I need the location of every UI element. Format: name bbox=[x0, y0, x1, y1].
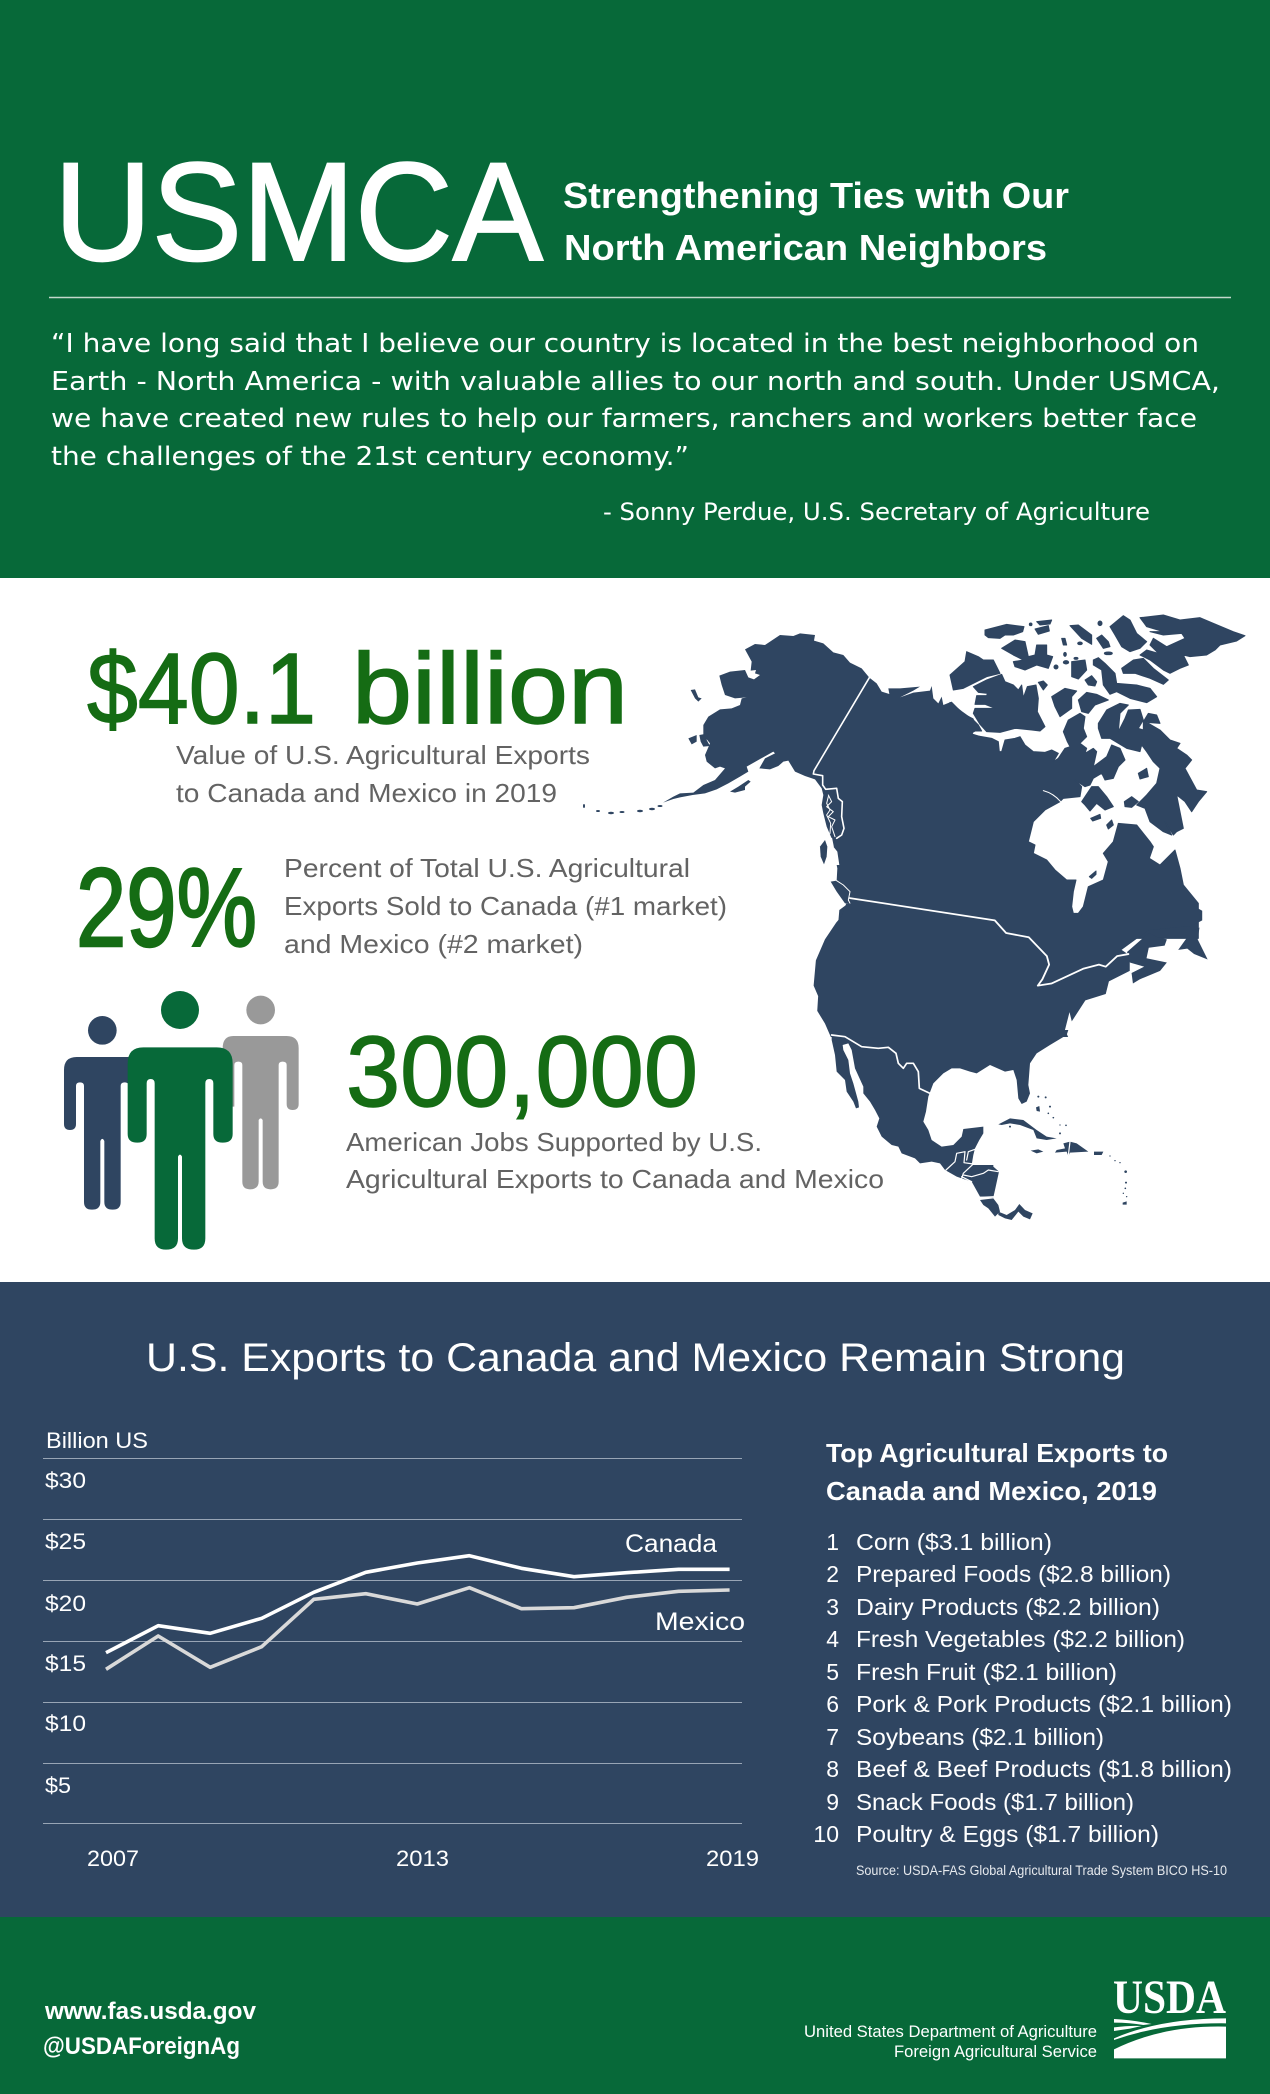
top exports list: 9 bbox=[826, 1789, 839, 1815]
stat: 29%: Exports Sold to Canada (#1 market) bbox=[284, 891, 727, 921]
title: USMCA: USMCA bbox=[54, 133, 544, 290]
stat: $40.1 billion bbox=[87, 633, 628, 808]
stat: 300,000 bbox=[346, 1016, 884, 1194]
stat: 29%: Percent of Total U.S. Agricultural bbox=[284, 853, 690, 883]
stat: 300,000: 300,000 bbox=[346, 1016, 698, 1128]
y axis labels: $10 bbox=[45, 1711, 86, 1736]
section heading: U.S. Exports to Canada and Mexico Remain Strong bbox=[146, 1336, 1125, 1380]
top exports list: 1 bbox=[826, 1529, 839, 1555]
map: northern and eastern Canada bbox=[950, 615, 1245, 938]
top exports list: Prepared Foods ($2.8 billion) bbox=[856, 1561, 1171, 1587]
top exports list: Poultry & Eggs ($1.7 billion) bbox=[856, 1821, 1159, 1847]
website and social handle: @USDAForeignAg bbox=[43, 2033, 240, 2060]
y axis labels: $5 bbox=[45, 1773, 71, 1798]
quote attribution: - Sonny Perdue, U.S. Secretary of Agriculture bbox=[603, 498, 1150, 526]
website and social handle bbox=[43, 1998, 257, 2060]
top exports list: Snack Foods ($1.7 billion) bbox=[856, 1789, 1134, 1815]
line: Canada bbox=[106, 1556, 730, 1653]
stat: $40.1 billion: billion bbox=[352, 633, 628, 745]
stat: 29%: 29% bbox=[76, 846, 257, 970]
top exports list: 2 bbox=[826, 1561, 839, 1587]
line: Mexico bbox=[106, 1588, 730, 1669]
stat: 29%: and Mexico (#2 market) bbox=[284, 929, 583, 959]
map: North America bbox=[583, 615, 1245, 1220]
list heading: Top Agricultural Exports to bbox=[826, 1438, 1168, 1468]
y axis labels bbox=[45, 1468, 86, 1798]
map: United States and eastern provinces bbox=[814, 898, 1208, 1037]
quote text: Earth - North America - with valuable allies to our north and south. Under USMCA, bbox=[51, 367, 1220, 397]
top exports list: Pork & Pork Products ($2.1 billion) bbox=[856, 1691, 1232, 1717]
top exports list: 10 bbox=[813, 1821, 839, 1847]
quote text bbox=[51, 329, 1220, 472]
panel: exports chart and list bbox=[0, 1282, 1270, 1918]
subtitle: North American Neighbors bbox=[564, 227, 1047, 268]
stat: $40.1 billion: Value of U.S. Agricultural Exports bbox=[176, 740, 590, 770]
top exports list: 6 bbox=[826, 1691, 839, 1717]
stat: 300,000: American Jobs Supported by U.S. bbox=[346, 1127, 762, 1157]
agency name: United States Department of Agriculture bbox=[804, 2022, 1097, 2041]
x axis labels bbox=[87, 1846, 759, 1871]
top exports list: 4 bbox=[826, 1626, 839, 1652]
top exports list: 5 bbox=[826, 1659, 839, 1685]
list heading: Canada and Mexico, 2019 bbox=[826, 1476, 1157, 1506]
map: Aleutian islands bbox=[583, 804, 662, 814]
stat: 300,000: Agricultural Exports to Canada and Mexico bbox=[346, 1164, 884, 1194]
website and social handle: www.fas.usda.gov bbox=[44, 1998, 257, 2025]
quote text: the challenges of the 21st century economy.” bbox=[51, 442, 689, 472]
x axis labels: 2013 bbox=[396, 1846, 449, 1871]
line chart bbox=[43, 1428, 759, 1871]
logo: USDA: USDA bbox=[1113, 1971, 1226, 2024]
subtitle: Strengthening Ties with Our bbox=[563, 175, 1069, 216]
subtitle bbox=[563, 175, 1069, 268]
quote text: we have created new rules to help our farmers, ranchers and workers better face bbox=[51, 404, 1197, 434]
map: Mexico, southern US and Central America bbox=[832, 1030, 1127, 1220]
panel: footer bbox=[0, 1917, 1270, 2094]
quote text: “I have long said that I believe our country is located in the best neighborhood on bbox=[51, 329, 1199, 359]
top exports list: Soybeans ($2.1 billion) bbox=[856, 1724, 1104, 1750]
x axis labels: 2019 bbox=[706, 1846, 759, 1871]
agency name bbox=[804, 2022, 1097, 2061]
x axis labels: 2007 bbox=[87, 1846, 139, 1871]
top exports list bbox=[813, 1529, 1232, 1847]
stat: 29% bbox=[76, 846, 727, 970]
series label: Mexico: Mexico bbox=[655, 1608, 745, 1636]
panel: header bbox=[0, 0, 1270, 578]
top exports list: Fresh Vegetables ($2.2 billion) bbox=[856, 1626, 1185, 1652]
y axis labels: $20 bbox=[45, 1591, 86, 1616]
top exports list: 3 bbox=[826, 1594, 839, 1620]
top exports list: Corn ($3.1 billion) bbox=[856, 1529, 1052, 1555]
stat: $40.1 billion: $40.1 bbox=[87, 633, 316, 745]
agency name: Foreign Agricultural Service bbox=[894, 2042, 1097, 2061]
top exports list: 8 bbox=[826, 1756, 839, 1782]
map: Alaska and western Canada bbox=[663, 633, 982, 940]
top exports list: Beef & Beef Products ($1.8 billion) bbox=[856, 1756, 1232, 1782]
source note: Source: USDA-FAS Global Agricultural Trade System BICO HS-10 bbox=[856, 1863, 1227, 1878]
y axis labels: $25 bbox=[45, 1529, 86, 1554]
axis unit label: Billion US bbox=[46, 1428, 148, 1453]
stat: $40.1 billion: to Canada and Mexico in 2019 bbox=[176, 778, 557, 808]
logo: USDA bbox=[1113, 1971, 1226, 2058]
list heading bbox=[826, 1438, 1168, 1506]
icon: three people bbox=[64, 991, 299, 1250]
top exports list: Fresh Fruit ($2.1 billion) bbox=[856, 1659, 1117, 1685]
top exports list: 7 bbox=[826, 1724, 839, 1750]
series label: Canada: Canada bbox=[625, 1530, 717, 1558]
y axis labels: $15 bbox=[45, 1651, 86, 1676]
y axis labels: $30 bbox=[45, 1468, 86, 1493]
top exports list: Dairy Products ($2.2 billion) bbox=[856, 1594, 1160, 1620]
